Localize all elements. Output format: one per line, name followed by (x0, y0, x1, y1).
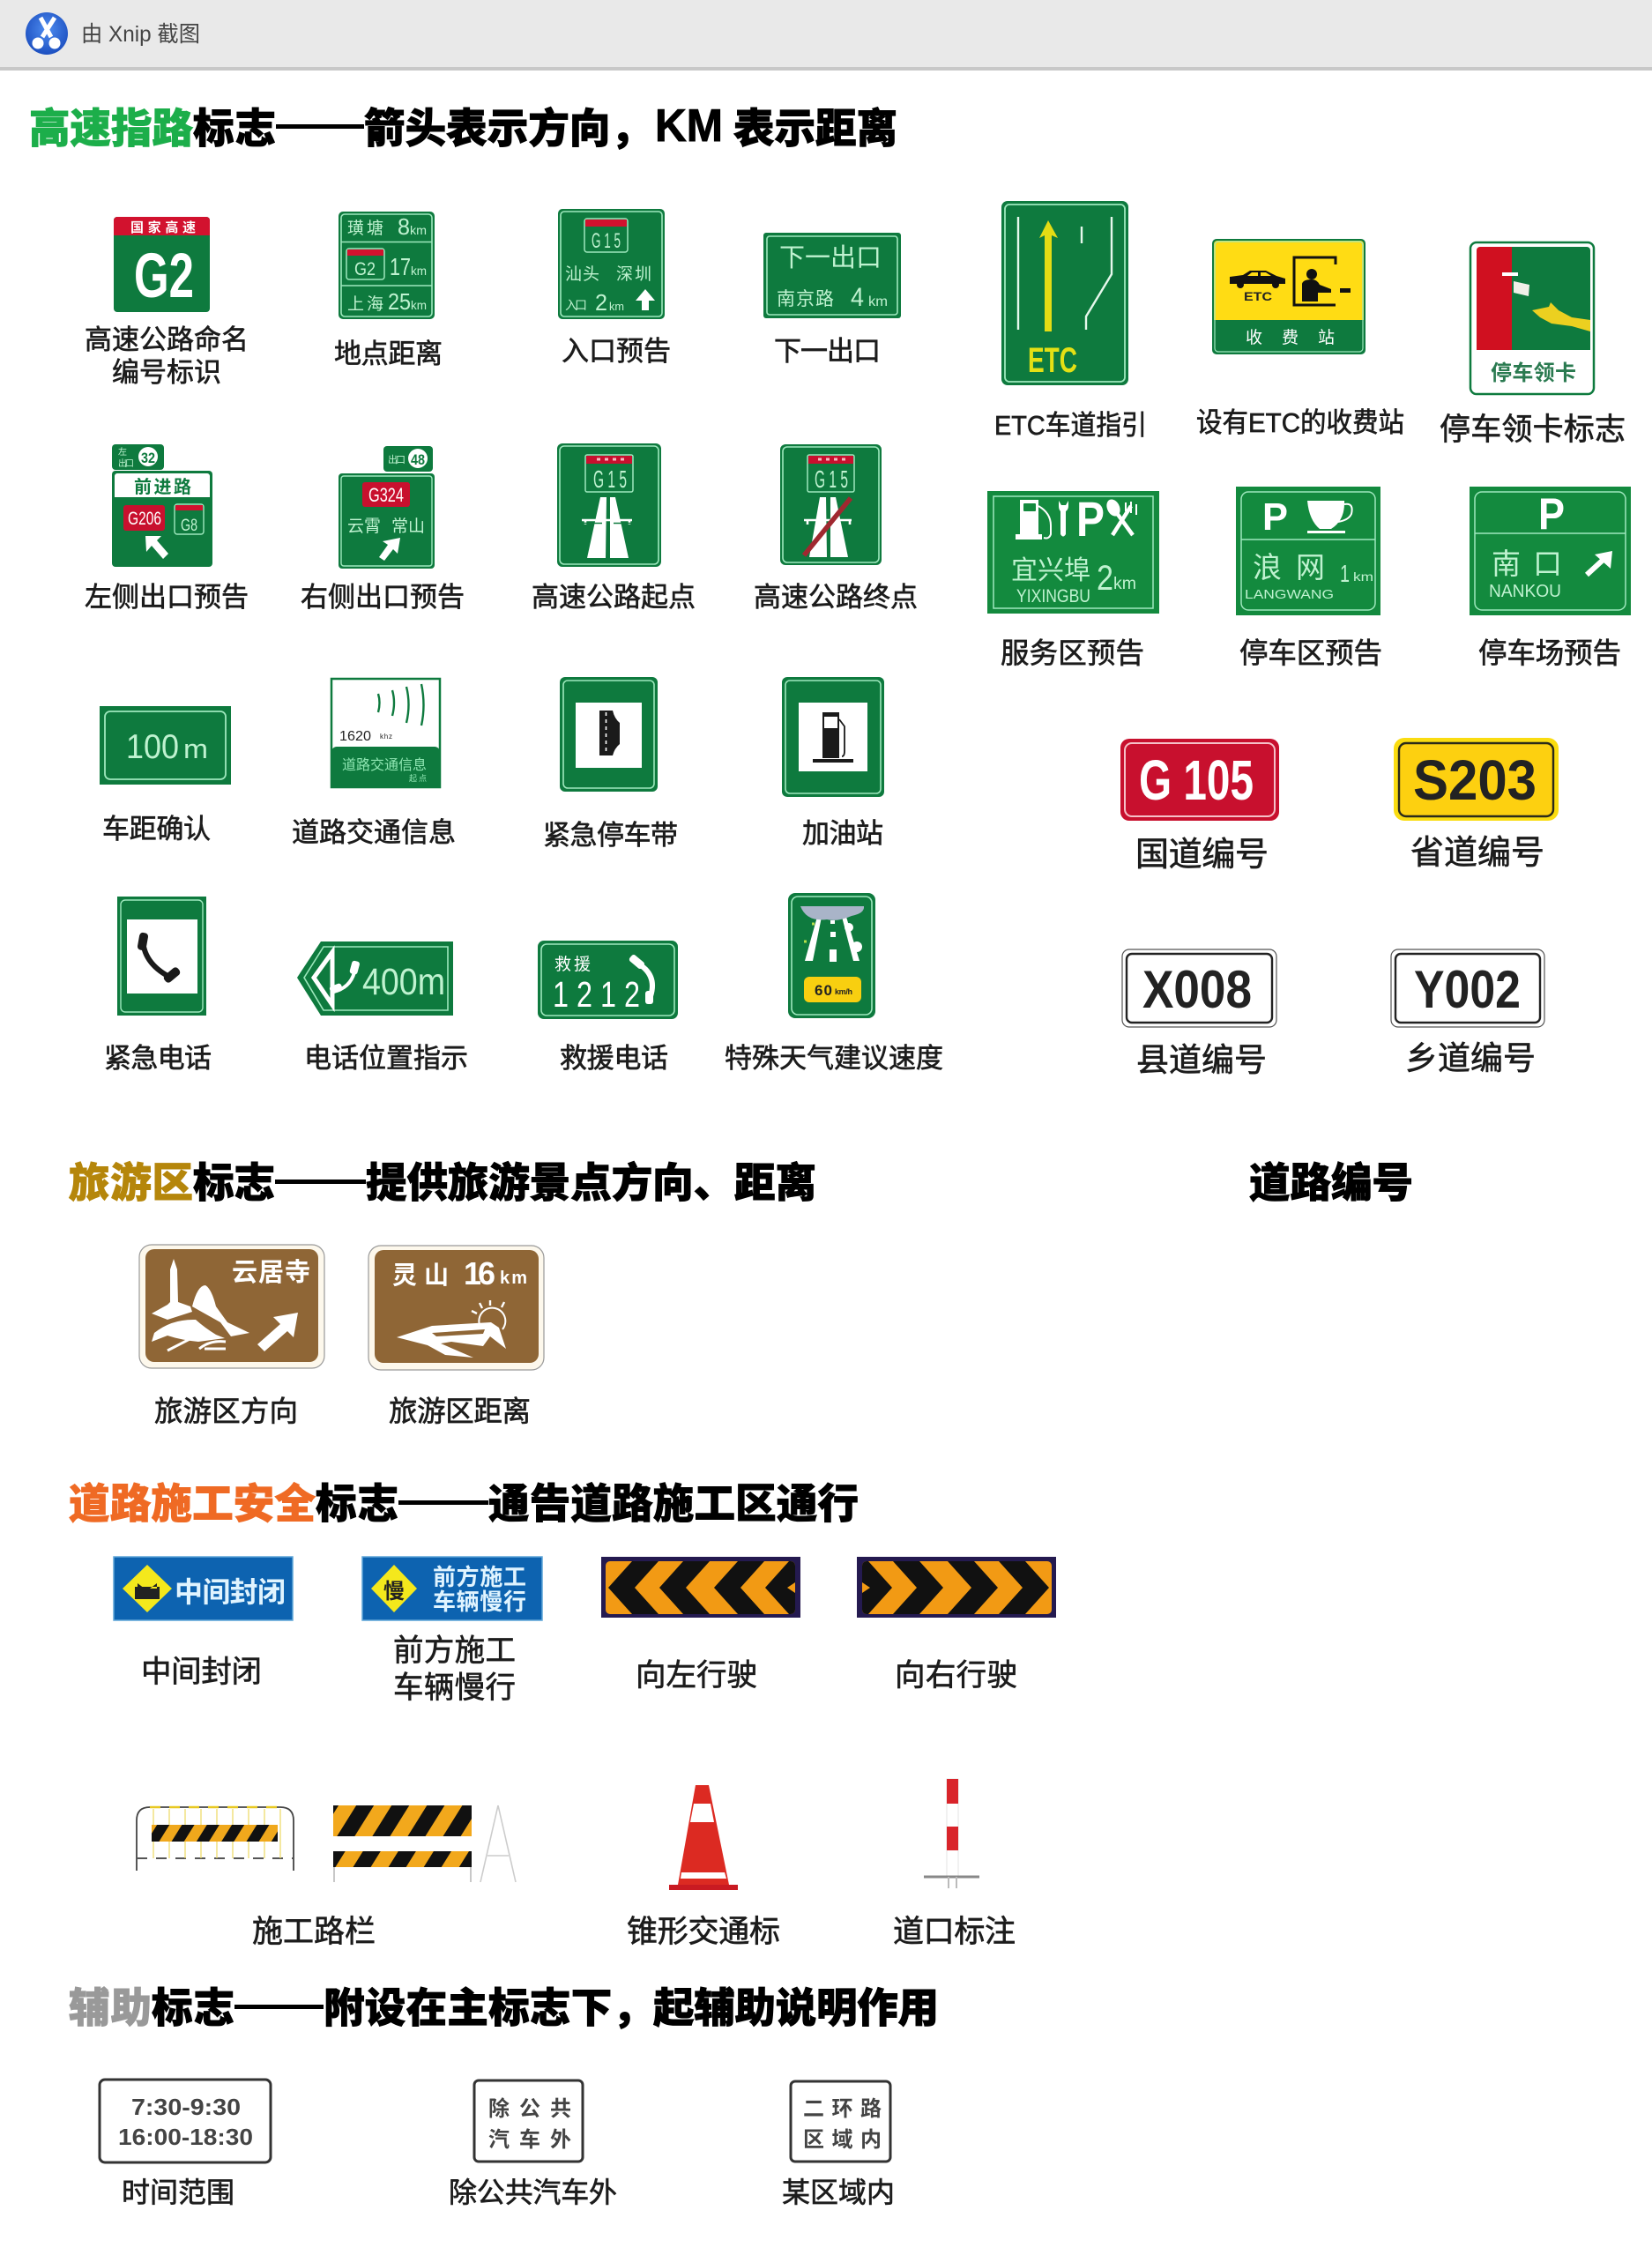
label: next exit: 下一出口 (774, 336, 881, 367)
sign: parking area (1236, 487, 1380, 615)
sign: except buses (474, 2080, 583, 2162)
sign: time range (100, 2080, 271, 2162)
heading: auxiliary: 附设在主标志下， (324, 1985, 653, 2031)
sign: entrance notice: G 1 5 (592, 229, 621, 253)
header bar: Xnip (0, 0, 1652, 71)
label: median closed: 中间封闭 (141, 1656, 262, 1689)
label: except buses: 除公共汽车外 (449, 2177, 617, 2208)
label: emergency stopping lane: 紧急停车带 (543, 820, 678, 851)
label: road traffic info: 道路交通信息 (292, 817, 456, 848)
sign: tourist direction: 云居寺 (232, 1258, 310, 1287)
label: national road: 国道编号 (1135, 837, 1269, 874)
heading: auxiliary: 辅助 (69, 1985, 152, 2031)
heading: tourist area (69, 1160, 816, 1206)
label: expressway name: 高速公路命名 (85, 324, 249, 355)
sign: G2 expressway name (114, 217, 210, 312)
label: slow ahead: 前方施工 (393, 1634, 516, 1668)
sign: G2 expressway name: G2 (134, 242, 194, 311)
label: emergency phone: 紧急电话 (104, 1043, 212, 1074)
label: crossing post: 道口标注 (893, 1915, 1016, 1949)
label: rescue phone: 救援电话 (560, 1043, 668, 1074)
sign: bad-weather speed (788, 893, 875, 1018)
heading: auxiliary (69, 1985, 939, 2031)
heading: construction safety: 标志 (316, 1481, 398, 1527)
label: keep left: 向左行驶 (636, 1659, 757, 1693)
heading: construction safety (69, 1481, 859, 1527)
label: county road: 县道编号 (1136, 1042, 1267, 1078)
sign: parking area: P (1262, 495, 1288, 539)
sign: next exit: km (868, 294, 888, 309)
sign: distance confirm 100m: 100 (126, 728, 179, 766)
sign: distance confirm 100m (100, 706, 231, 785)
heading: highway guide: KM (655, 100, 723, 152)
sign: parking area: 1 (1340, 560, 1350, 587)
sign: parking area: km (1353, 569, 1373, 584)
sign: right exit notice: 出口 (388, 453, 406, 465)
section: tourist signs (69, 1160, 816, 1427)
sign: tourist distance: km (500, 1269, 527, 1288)
section: road construction signs (69, 1481, 1056, 1949)
sign: tourist distance: 16 (464, 1255, 495, 1291)
sign: slow ahead: 车辆慢行 (433, 1589, 526, 1615)
sign: expressway end (780, 444, 882, 565)
sign: service area (987, 491, 1159, 614)
sign: time range: 16:00-18:30 (118, 2124, 253, 2150)
sign: entrance notice: km (609, 300, 624, 313)
sign: keep left chevrons (601, 1557, 800, 1618)
sign: place distance: 上海 (347, 294, 383, 314)
sign: G105 national road: G 105 (1139, 748, 1254, 812)
sign: within ring road: 二环路 (803, 2097, 882, 2121)
sign: tourist distance: 灵 山 (392, 1261, 449, 1289)
sign: road traffic info: 1620 (339, 729, 371, 744)
sign: keep right chevrons (857, 1557, 1056, 1618)
sign: tourist distance (368, 1246, 544, 1370)
sign: next exit: 南京路 (777, 289, 834, 309)
sign: right exit notice: G324 (368, 484, 404, 506)
sign: time range: 7:30-9:30 (131, 2094, 241, 2120)
sign: G2 expressway name: 国家高速 (130, 220, 196, 235)
sign: ETC lane guide (1001, 201, 1128, 385)
sign: left exit notice: G206 (128, 509, 161, 529)
section: highway guide signs (29, 100, 1631, 1074)
sign: left exit notice: 32 (141, 450, 155, 466)
heading: highway guide: 箭头表示方向， (364, 106, 651, 152)
sign: bad-weather speed: 60 (815, 982, 832, 999)
heading: tourist area: 旅游区 (69, 1160, 193, 1206)
sign: bad-weather speed: km/h (835, 987, 852, 996)
sign: left exit notice (112, 444, 212, 567)
sign: parking card (1470, 242, 1594, 394)
label: construction barrier: 施工路栏 (252, 1915, 376, 1949)
sign: service area: YIXINGBU (1016, 586, 1090, 607)
sign: place distance: km (411, 298, 427, 312)
sign: parking lot: 南 口 (1492, 547, 1562, 580)
sign: slow ahead: 前方施工 (433, 1564, 526, 1590)
label: left exit notice: 左侧出口预告 (85, 582, 249, 613)
heading: highway guide: 高速指路 (29, 106, 194, 152)
sign: entrance notice (558, 209, 665, 319)
sign: place distance: 17 (390, 253, 411, 280)
sign: place distance (339, 212, 435, 319)
sign: parking card: 停车领卡 (1491, 361, 1576, 385)
label: time range: 时间范围 (122, 2177, 234, 2208)
heading: tourist area: 提供旅游景点方向、距离 (366, 1160, 816, 1206)
heading: auxiliary: 标志 (152, 1985, 234, 2031)
label: township road: 乡道编号 (1405, 1040, 1536, 1076)
label: tourist distance: 旅游区距离 (389, 1395, 531, 1427)
sign: Y002 township road (1391, 949, 1544, 1027)
label: place distance: 地点距离 (334, 339, 443, 369)
sign: S203 provincial road (1394, 738, 1559, 821)
heading: construction safety: 通告道路施工区通行 (488, 1481, 859, 1527)
sign: median closed: 中间封闭 (175, 1576, 286, 1608)
sign: expressway start (557, 443, 661, 567)
label: phone location: 电话位置指示 (304, 1043, 468, 1074)
sign: service area: 2 (1097, 559, 1113, 598)
sign: place distance: 25 (388, 288, 411, 315)
label: distance confirm: 车距确认 (102, 814, 211, 845)
label: ETC lane guide: ETC车道指引 (994, 410, 1147, 441)
label: entrance notice: 入口预告 (562, 336, 671, 367)
label: expressway end: 高速公路终点 (754, 582, 918, 613)
sign: place distance: G2 (354, 259, 376, 279)
sign: traffic cone (669, 1785, 738, 1890)
heading: highway guide: 标志 (193, 106, 276, 152)
label: gas station: 加油站 (802, 818, 883, 849)
sign: expressway end: G 1 5 (815, 465, 848, 493)
header text: 由 Xnip 截图 (81, 22, 200, 47)
sign: slow ahead: 慢 (383, 1580, 405, 1604)
sign: parking lot: P (1538, 489, 1565, 539)
sign: ETC lane guide: ETC (1028, 341, 1077, 380)
sign: expressway start: G 1 5 (593, 465, 627, 493)
label: ETC toll station: 设有ETC的收费站 (1196, 407, 1404, 438)
label: parking card: 停车领卡标志 (1440, 413, 1626, 447)
label: traffic cone: 锥形交通标 (627, 1915, 780, 1949)
sign: phone location: 400m (362, 961, 445, 1003)
sign: rescue phone (538, 941, 678, 1019)
sign: median closed (114, 1557, 293, 1620)
sign: gas station (782, 677, 884, 797)
sign: place distance: 8 (398, 213, 410, 240)
sign: emergency phone (117, 897, 206, 1016)
heading: tourist area: 标志 (193, 1160, 275, 1206)
sign: right exit notice (339, 446, 435, 569)
sign: place distance: 璜塘 (347, 219, 383, 238)
sign: ETC toll station: 收费站 (1246, 328, 1335, 347)
sign: ETC toll station (1212, 239, 1366, 354)
label: parking area: 停车区预告 (1239, 637, 1382, 669)
sign: right exit notice: 常山 (391, 517, 425, 536)
heading: road numbering: 道路编号 (1249, 1160, 1413, 1206)
sign: tourist direction (139, 1245, 324, 1368)
sign: left exit notice: 前进路 (134, 477, 191, 497)
sign: road traffic info: 道路交通信息 (342, 757, 427, 773)
label: within area: 某区域内 (782, 2177, 895, 2208)
sign: place distance: km (411, 264, 427, 278)
label: slow ahead (393, 1634, 516, 1705)
sign: within ring road (791, 2081, 890, 2162)
section: auxiliary signs (69, 1985, 939, 2208)
label: right exit notice: 右侧出口预告 (301, 582, 465, 613)
sign: parking lot (1470, 487, 1631, 615)
sign: X008 county road: X008 (1142, 960, 1252, 1019)
heading: auxiliary: 起辅助说明作用 (653, 1985, 939, 2031)
sign: parking area: LANGWANG (1245, 587, 1334, 602)
label: keep right: 向右行驶 (895, 1659, 1017, 1693)
sign: crossing post (924, 1779, 979, 1888)
sign: Y002 township road: Y002 (1414, 960, 1521, 1019)
sign: service area: P (1076, 491, 1105, 547)
sign: rescue phone: 1 2 1 2 (553, 974, 640, 1015)
sign: right exit notice: 云霄 (347, 517, 381, 536)
label: expressway start: 高速公路起点 (532, 582, 696, 613)
sign: right exit notice: 48 (411, 451, 425, 468)
sign: construction barrier (333, 1805, 516, 1882)
sign: road traffic info: 起点 (409, 774, 427, 783)
sign: entrance notice: 汕头 (565, 264, 599, 284)
sign: emergency stopping lane (560, 677, 658, 792)
label: parking lot: 停车场预告 (1478, 637, 1621, 669)
sign: S203 provincial road: S203 (1413, 748, 1537, 812)
label: slow ahead: 车辆慢行 (393, 1671, 516, 1705)
sign: X008 county road (1122, 949, 1276, 1027)
sign: except buses: 汽车外 (488, 2128, 571, 2152)
section: road numbering (1120, 738, 1559, 1206)
sign: next exit: 4 (851, 283, 864, 312)
sign: except buses: 除公共 (488, 2097, 571, 2121)
sign: next exit: 下一出口 (779, 243, 882, 272)
sign: entrance notice: 深圳 (616, 264, 651, 284)
label: service area: 服务区预告 (1001, 637, 1144, 669)
sign: road traffic info (331, 679, 440, 787)
sign: within ring road: 区域内 (803, 2128, 882, 2152)
heading: construction safety: 道路施工安全 (69, 1481, 316, 1527)
sign: construction fence (137, 1807, 294, 1871)
sign: ETC toll station: ETC (1244, 289, 1272, 303)
sign: road traffic info: khz (380, 733, 392, 741)
sign: parking area: 浪 网 (1253, 551, 1325, 584)
label: expressway name: 编号标识 (112, 357, 221, 388)
label: provincial road: 省道编号 (1410, 835, 1544, 872)
label: tourist direction: 旅游区方向 (154, 1395, 298, 1427)
heading: highway guide: 表示距离 (733, 106, 897, 152)
icon: Xnip logo (26, 12, 68, 55)
label: bad-weather speed: 特殊天气建议速度 (725, 1043, 943, 1074)
sign: phone location (297, 941, 453, 1016)
sign: service area: km (1113, 575, 1136, 593)
sign: next exit (763, 233, 901, 318)
sign: slow ahead (362, 1557, 542, 1620)
sign: place distance: km (410, 223, 427, 237)
sign: rescue phone: 救援 (554, 955, 591, 974)
sign: left exit notice: 左 (118, 446, 127, 458)
sign: G105 national road (1120, 739, 1279, 821)
sign: left exit notice: 出口 (118, 458, 134, 469)
sign: entrance notice: 入口 (565, 298, 587, 312)
sign: entrance notice: 2 (595, 289, 607, 316)
sign: distance confirm 100m: m (183, 733, 208, 764)
heading: highway guide (29, 100, 897, 152)
sign: parking lot: NANKOU (1489, 582, 1561, 601)
label: expressway name (85, 324, 249, 388)
sign: left exit notice: G8 (181, 517, 197, 535)
sign: service area: 宜兴埠 (1011, 556, 1090, 585)
